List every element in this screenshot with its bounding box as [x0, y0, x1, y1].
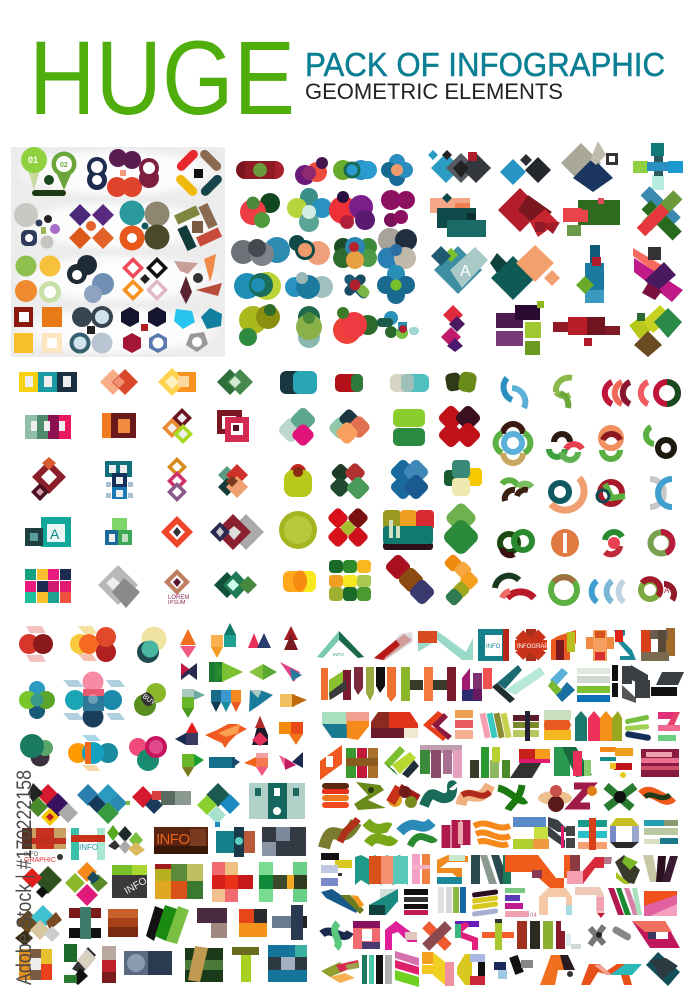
square row 2: [25, 408, 249, 444]
blocks row 2: [430, 186, 683, 241]
square row 4: A: [50, 526, 60, 542]
arcs row 1: [504, 378, 678, 408]
badges row 1: [21, 147, 224, 198]
heading: geometric elements: GEOMETRIC ELEMENTS: [305, 79, 563, 104]
panel: circles and triangles: [19, 623, 307, 777]
ribbons row 8: [321, 887, 677, 919]
panel: diamond and rectangle blocks: [428, 141, 683, 357]
tile background: [11, 147, 225, 357]
panel: flat square info blocks: [15, 783, 307, 985]
info row 2: INFO: [24, 852, 39, 858]
circles row 4: [234, 265, 415, 304]
circles row 5: [239, 304, 419, 348]
heading: pack of infographic: PACK OF INFOGRAPHIC: [305, 46, 665, 83]
triangles row 3: [182, 689, 307, 718]
triangles row 2: [181, 662, 302, 682]
panel: square shapes: [19, 368, 264, 608]
arcs row 5: [495, 576, 674, 603]
info row 5: [19, 944, 307, 985]
rounded row 4: [279, 501, 481, 557]
blocks row 3: A: [460, 263, 471, 280]
blocks row 1: [428, 141, 683, 192]
badges row 4: [14, 306, 222, 354]
vertical stock credit: Adobe Stock | #170222158: [13, 770, 36, 985]
info row 3: [22, 862, 307, 906]
triangles row 5: [182, 752, 303, 777]
info row 2: INFO: [79, 843, 98, 852]
square row 1: [19, 368, 253, 396]
wavy ribbons row 6: [324, 817, 678, 850]
panel: overlapping circle badges: [231, 154, 419, 348]
info row 2: [22, 825, 306, 864]
triangles row 1: [180, 623, 298, 658]
info row 2: INFO: [156, 831, 190, 848]
panel: ring and arc shapes: [495, 378, 678, 603]
ribbons row 7: [321, 853, 678, 888]
panel: flat badges on grey tiles: [11, 147, 225, 357]
square row 4: [25, 514, 264, 550]
ribbons row 9: [322, 919, 680, 951]
info row 3: INFO: [123, 875, 149, 897]
info row 2: GRAPHIC: [24, 857, 56, 864]
badges row 1: 02: [60, 162, 68, 169]
circle cluster row 2: [19, 672, 166, 728]
rounded row 3: [284, 458, 482, 501]
circle cluster row 2: BUY: [141, 693, 157, 707]
panel: banner and ribbon elements: [317, 628, 684, 987]
arcs row 3: [502, 478, 672, 510]
circle cluster row 1: [19, 626, 166, 663]
ribbons row 1: INFO: [333, 652, 344, 657]
info row 1: [28, 783, 305, 827]
triangles row 4: [175, 716, 303, 748]
badges row 3: [15, 254, 222, 304]
rounded row 2: [277, 404, 482, 449]
arcs row 5: A: [664, 586, 670, 595]
ribbons row 1: INFOGRAPHIC: [517, 644, 559, 650]
title: [29, 20, 665, 137]
heading: HUGE: HUGE: [29, 20, 295, 137]
rounded row 5: [283, 553, 480, 607]
ribbons row 10: [321, 951, 680, 987]
ribbons row 8: 04: [530, 913, 537, 919]
square row 5: [25, 565, 257, 608]
circle cluster row 3: [20, 734, 167, 771]
ribbons row 1: INFO: [486, 644, 501, 650]
ribbons row 2: [321, 665, 684, 703]
wavy ribbons row 5: [322, 782, 672, 812]
square row 5: LOREM: [168, 595, 189, 601]
rounded row 1: [280, 371, 478, 394]
panel: rounded square shapes: [277, 371, 482, 607]
blocks row 3: [431, 245, 683, 303]
blocks row 4: [441, 301, 682, 357]
circles row 2: [240, 188, 415, 232]
ribbons row 1: [317, 628, 675, 661]
ribbons row 3: [322, 710, 680, 741]
info row 4: [15, 905, 307, 946]
square row 3: [31, 457, 248, 502]
badges row 1: 01: [28, 155, 38, 165]
circles row 1: [236, 154, 413, 186]
ribbons row 4: [320, 745, 679, 780]
square row 5: IPSUM: [168, 600, 186, 606]
badges row 2: [14, 200, 222, 251]
arcs row 2: [496, 424, 674, 463]
arcs row 4: [500, 529, 672, 557]
circles row 3: [231, 228, 417, 269]
